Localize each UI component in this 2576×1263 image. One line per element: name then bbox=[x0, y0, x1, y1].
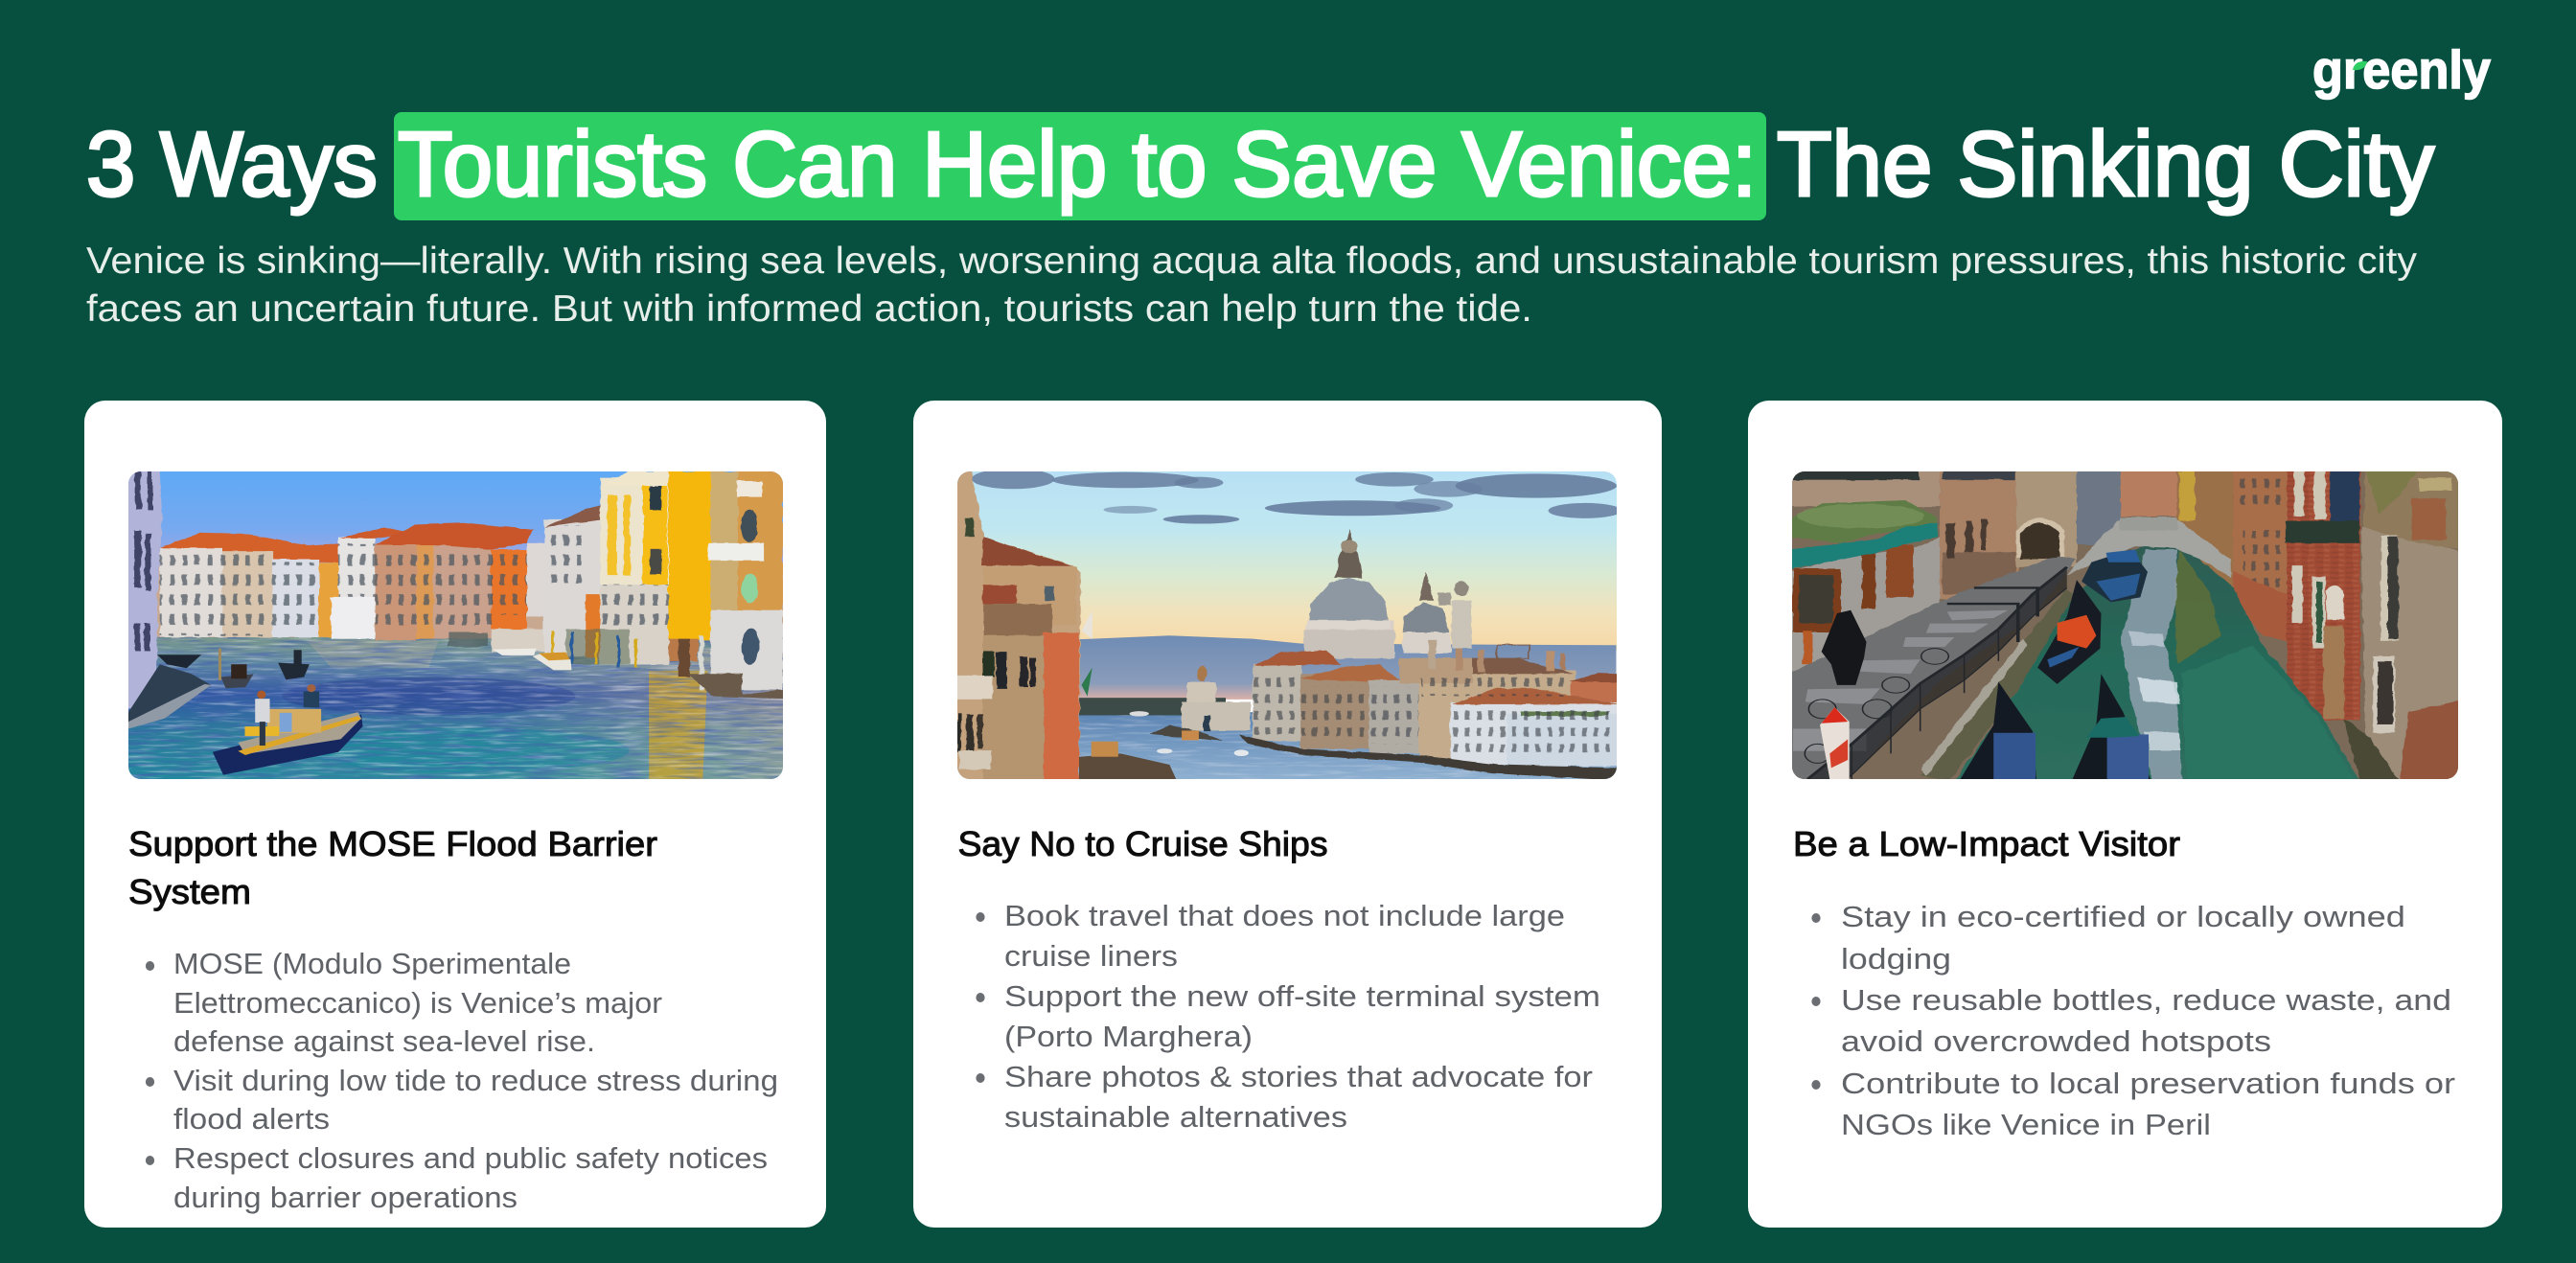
title bbox=[86, 112, 2434, 220]
bullet list: Use reusable bottles, reduce waste, and bbox=[1841, 983, 2451, 1017]
bullet list: NGOs like Venice in Peril bbox=[1841, 1108, 2211, 1141]
bullet list: Stay in eco-certified or locally owned bbox=[1841, 900, 2405, 933]
logo: greenly: greenly bbox=[2312, 39, 2491, 100]
bullet list: Book travel that does not include large bbox=[1004, 899, 1565, 932]
bullet list: cruise liners bbox=[1004, 939, 1178, 973]
heading: Support the MOSE Flood Barrier bbox=[128, 824, 657, 863]
title highlight bbox=[394, 112, 1766, 220]
bullet list: Respect closures and public safety notices bbox=[173, 1141, 768, 1175]
bullet list: Contribute to local preservation funds or bbox=[1841, 1067, 2455, 1100]
bullet list: during barrier operations bbox=[173, 1181, 518, 1214]
intro text bbox=[86, 241, 2418, 330]
panel: Be a Low-Impact Visitor bbox=[1748, 401, 2502, 1228]
bullet list: avoid overcrowded hotspots bbox=[1841, 1024, 2271, 1058]
bullet list: Visit during low tide to reduce stress during bbox=[173, 1064, 778, 1097]
panel: Say No to Cruise Ships bbox=[913, 401, 1662, 1228]
bullet list: Elettromeccanico) is Venice’s major bbox=[173, 986, 662, 1020]
heading bbox=[128, 824, 657, 911]
photo: Grand Canal with colourful palaces bbox=[126, 470, 786, 779]
heading: System bbox=[128, 872, 251, 911]
bullet list: sustainable alternatives bbox=[1004, 1100, 1347, 1134]
photo: Santa Maria della Salute at dusk bbox=[954, 469, 1622, 781]
bullet list: MOSE (Modulo Sperimentale bbox=[173, 947, 571, 980]
title: Tourists Can Help to Save Venice: bbox=[398, 113, 1757, 216]
intro text: faces an uncertain future. But with informed action, tourists can help turn the tide. bbox=[86, 288, 1532, 330]
bullet list bbox=[146, 947, 778, 1214]
bullet list: defense against sea-level rise. bbox=[173, 1024, 595, 1058]
bullet list bbox=[1811, 900, 2455, 1141]
title: 3 Ways bbox=[86, 113, 378, 216]
photo: narrow canal with gondolas bbox=[1788, 470, 2463, 781]
bullet list bbox=[976, 899, 1600, 1134]
panel: Support the MOSE Flood Barrier System bbox=[84, 401, 826, 1228]
heading: Be a Low-Impact Visitor bbox=[1793, 824, 2180, 863]
bullet list: Share photos & stories that advocate for bbox=[1004, 1060, 1593, 1093]
bullet list: (Porto Marghera) bbox=[1004, 1020, 1253, 1053]
heading: Say No to Cruise Ships bbox=[958, 824, 1328, 863]
title: The Sinking City bbox=[1777, 113, 2434, 216]
bullet list: Support the new off-site terminal system bbox=[1004, 979, 1600, 1013]
bullet list: lodging bbox=[1841, 942, 1951, 976]
intro text: Venice is sinking—literally. With rising sea levels, worsening acqua alta floods, and unsustainable tourism pressures, this historic city bbox=[86, 241, 2418, 282]
bullet list: flood alerts bbox=[173, 1102, 330, 1136]
